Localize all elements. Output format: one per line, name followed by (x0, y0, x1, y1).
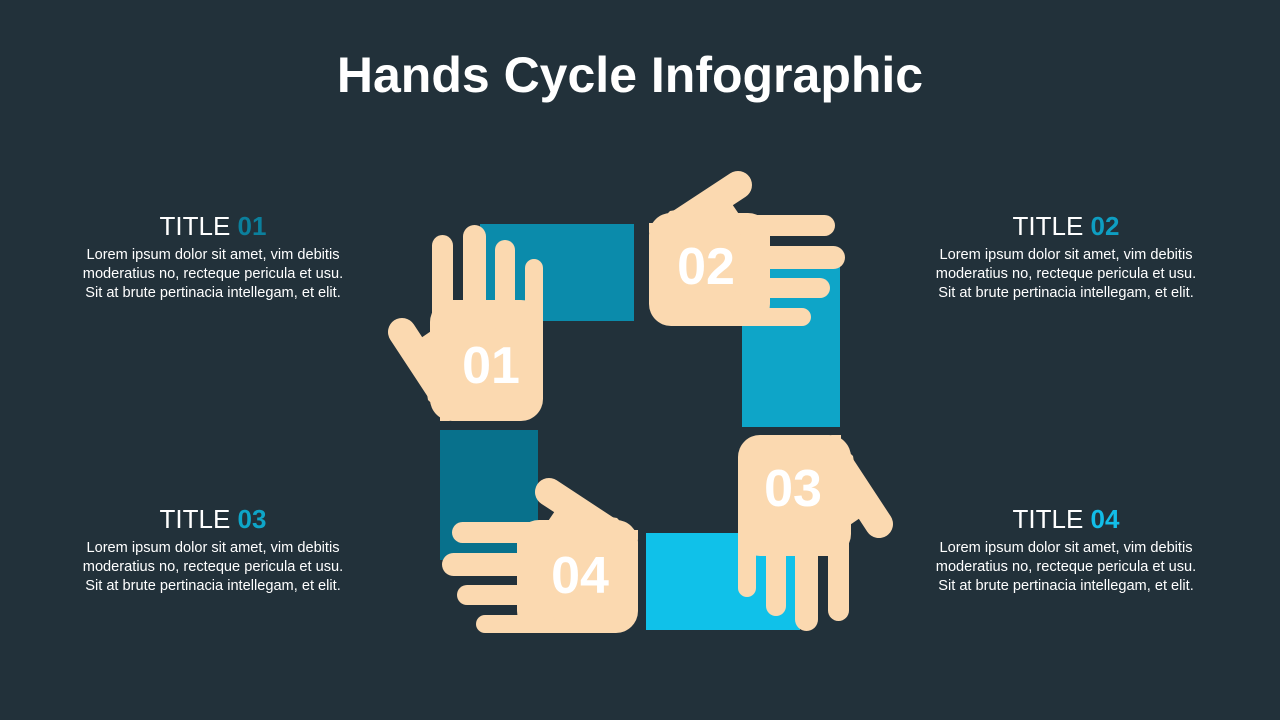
text block: title 02: TITLE 02 (1013, 211, 1119, 241)
text block: title 01: moderatius no, recteque pericula et usu. (83, 266, 343, 282)
hand 1 (402, 225, 543, 421)
arm 2 (742, 262, 840, 427)
numbers: 04 (551, 547, 609, 605)
text block: title 02: moderatius no, recteque pericula et usu. (936, 266, 1196, 282)
text block: title 03 (83, 504, 343, 594)
arm 3 (646, 533, 800, 630)
arm 1 (480, 224, 634, 321)
text block: title 04 (936, 504, 1196, 594)
text block: title 02 (936, 211, 1196, 301)
hand 2 (649, 185, 845, 326)
text block: title 01: Lorem ipsum dolor sit amet, vim debitis (86, 247, 340, 263)
text block: title 03: TITLE 03 (160, 504, 266, 534)
numbers (462, 238, 822, 605)
text block: title 01: Sit at brute pertinacia intellegam, et elit. (85, 285, 341, 301)
text block: title 01 (83, 211, 343, 301)
hand 4 (442, 492, 638, 633)
text block: title 02: Sit at brute pertinacia intellegam, et elit. (938, 285, 1194, 301)
text block: title 04: moderatius no, recteque pericula et usu. (936, 559, 1196, 575)
text block: title 03: Sit at brute pertinacia intellegam, et elit. (85, 578, 341, 594)
text block: title 03: moderatius no, recteque pericula et usu. (83, 559, 343, 575)
title: Hands Cycle Infographic (337, 47, 923, 103)
text block: title 03: Lorem ipsum dolor sit amet, vim debitis (86, 540, 340, 556)
text block: title 04: Lorem ipsum dolor sit amet, vim debitis (939, 540, 1193, 556)
hand 3 (738, 435, 879, 631)
text block: title 01: TITLE 01 (160, 211, 266, 241)
numbers: 01 (462, 337, 520, 395)
arm 4 (440, 430, 538, 560)
numbers: 02 (677, 238, 735, 296)
numbers: 03 (764, 460, 822, 518)
text block: title 04: Sit at brute pertinacia intellegam, et elit. (938, 578, 1194, 594)
text block: title 02: Lorem ipsum dolor sit amet, vim debitis (939, 247, 1193, 263)
text block: title 04: TITLE 04 (1013, 504, 1119, 534)
